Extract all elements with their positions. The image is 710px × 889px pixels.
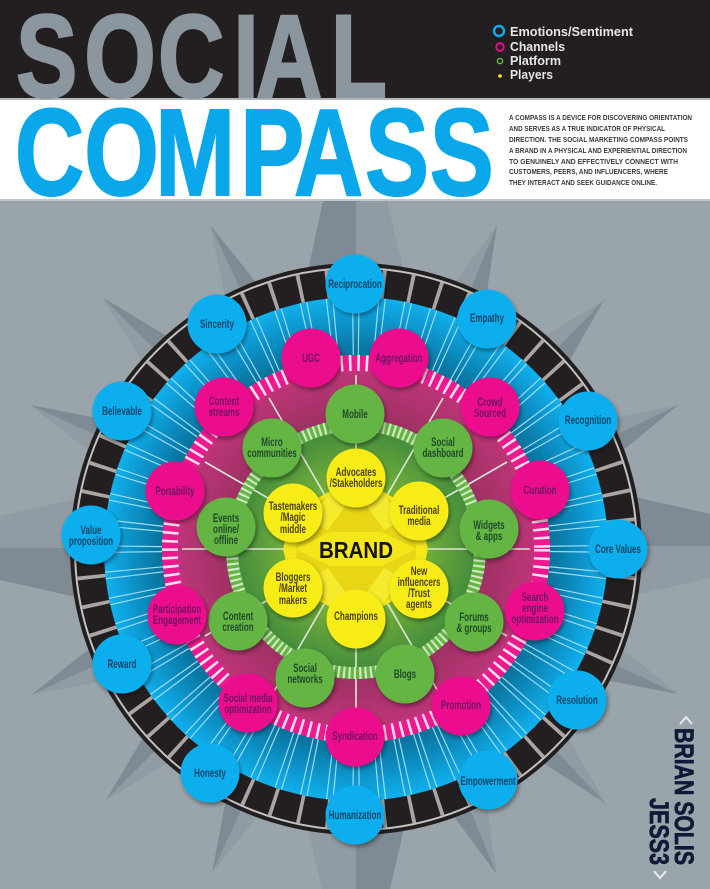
node: Forums & groups: & groups: [456, 623, 492, 635]
node: Tastemakers/Magic middle: [264, 484, 322, 542]
node: Crowd Sourced: [460, 378, 520, 436]
node: Empathy: [458, 290, 516, 348]
node: Champions: [326, 590, 386, 648]
channels nodes (magenta): [146, 328, 570, 766]
node: Traditional media: media: [407, 516, 431, 528]
node: Value proposition: [62, 506, 120, 564]
node: Syndication: [326, 708, 384, 766]
node: Reciprocation: Reciprocation: [328, 279, 382, 291]
legend: Channels: Channels: [510, 39, 565, 54]
node: Syndication: Syndication: [332, 731, 378, 743]
node: Curation: [510, 460, 570, 520]
node: Blogs: Blogs: [394, 669, 417, 681]
node: Content streams: [194, 378, 254, 436]
spokes between rings: [182, 375, 530, 723]
node: Participation Engagement: Participation: [153, 604, 201, 616]
node: Social networks: Social: [293, 663, 317, 675]
center label: BRAND: BRAND: [319, 537, 393, 563]
node: Empathy: Empathy: [470, 313, 504, 325]
node: Bloggers/Market makers: [264, 558, 322, 618]
node: Humanization: [326, 786, 384, 844]
node: New influencers/Trust agents: [390, 560, 448, 618]
node: Search engine optimization: engine: [522, 603, 548, 615]
node: Champions: Champions: [334, 611, 378, 623]
node: Content creation: creation: [222, 622, 254, 634]
node: Empowerment: Empowerment: [460, 776, 516, 788]
node: Tastemakers/Magic middle: Tastemakers: [269, 501, 318, 513]
node: Tastemakers/Magic middle: middle: [280, 524, 306, 536]
node: UGC: [282, 328, 340, 388]
node: Forums & groups: Forums: [459, 612, 489, 624]
intro paragraph: [509, 113, 692, 187]
node: Content streams: streams: [209, 407, 240, 419]
ring: blue emotions band: [104, 297, 608, 801]
intro paragraph: THEY INTERACT AND SEEK GUIDANCE ONLINE.: [509, 178, 657, 187]
legend: Players: Players: [510, 67, 553, 82]
node: Honesty: [180, 744, 240, 802]
node: UGC: UGC: [302, 353, 320, 365]
node: Advocates/Stakeholders: Advocates: [336, 467, 377, 479]
node: Bloggers/Market makers: /Market: [279, 583, 308, 595]
node: Widgets & apps: [460, 500, 518, 558]
node: New influencers/Trust agents: /Trust: [408, 588, 430, 600]
node: Sincerity: [188, 294, 246, 354]
brand core hexagon: [283, 476, 428, 622]
node: Social dashboard: dashboard: [422, 448, 464, 460]
intro paragraph: AND SERVES AS A TRUE INDICATOR OF PHYSICAL: [509, 124, 665, 133]
node: Widgets & apps: Widgets: [473, 520, 505, 532]
node: Social dashboard: [414, 418, 472, 478]
node: Value proposition: proposition: [69, 536, 113, 548]
node: New influencers/Trust agents: agents: [406, 599, 432, 611]
credit: chevron close: [654, 871, 666, 878]
node: Core Values: Core Values: [595, 544, 641, 556]
ring: magenta channels band: [162, 355, 550, 743]
node: Aggregation: Aggregation: [375, 353, 423, 365]
legend: Platform: Platform: [510, 53, 561, 68]
node: Events online/offline: [196, 498, 256, 556]
node: Humanization: Humanization: [329, 810, 381, 822]
node: Traditional media: [390, 482, 448, 540]
node: Forums & groups: [444, 592, 504, 652]
node: Social media optimization: optimization: [224, 704, 272, 716]
node: Recognition: Recognition: [565, 415, 611, 427]
platform nodes (green): [196, 384, 518, 708]
ring: black outer band: [70, 263, 642, 835]
intro paragraph: CUSTOMERS, PEERS, AND INFLUENCERS, WHERE: [509, 167, 668, 176]
credits: [644, 717, 699, 878]
node: Search engine optimization: [506, 582, 564, 640]
emotions nodes (blue): [62, 254, 648, 844]
node: Resolution: Resolution: [556, 695, 598, 707]
node: Crowd Sourced: Crowd: [477, 397, 503, 409]
node: Events online/offline: offline: [214, 535, 238, 547]
node: Content creation: [208, 592, 268, 650]
node: Resolution: [548, 670, 606, 730]
node: Promotion: [432, 676, 490, 736]
legend: Emotions/Sentiment: Emotions/Sentiment: [510, 24, 634, 39]
players nodes (yellow): [264, 448, 448, 648]
node: Widgets & apps: & apps: [476, 531, 503, 543]
node: Believable: Believable: [102, 406, 142, 418]
node: Reward: Reward: [107, 659, 137, 671]
compass dial: [70, 263, 642, 835]
node: Search engine optimization: optimization: [511, 614, 559, 626]
node: Traditional media: Traditional: [399, 505, 440, 517]
node: Blogs: [376, 644, 434, 704]
compass star points: [0, 201, 710, 889]
node: Aggregation: [370, 328, 428, 388]
node: Advocates/Stakeholders: /Stakeholders: [330, 478, 383, 490]
header band: [0, 0, 710, 201]
node: Bloggers/Market makers: Bloggers: [276, 572, 311, 584]
node: Curation: Curation: [523, 485, 557, 497]
credit: Jess3: JESS3: [644, 798, 674, 865]
node: Social dashboard: Social: [431, 437, 455, 449]
node: Bloggers/Market makers: makers: [279, 595, 307, 607]
node: New influencers/Trust agents: New: [411, 566, 427, 578]
node: Social media optimization: [218, 674, 278, 732]
node: Believable: [92, 382, 152, 440]
node: Portability: [146, 462, 204, 520]
node: Micro communities: communities: [247, 448, 297, 460]
node: Tastemakers/Magic middle: /Magic: [280, 512, 306, 524]
node: Content creation: Content: [223, 611, 254, 623]
node: New influencers/Trust agents: influencers: [398, 577, 441, 589]
node: Core Values: [588, 520, 648, 578]
node: Promotion: Promotion: [441, 700, 481, 712]
title: COMPASS: COMPASS: [15, 85, 494, 222]
node: Social networks: networks: [287, 674, 323, 686]
node: Micro communities: [242, 418, 302, 478]
node: Sincerity: Sincerity: [200, 319, 234, 331]
node: Micro communities: Micro: [261, 437, 283, 449]
node: Events online/offline: online/: [213, 524, 239, 536]
node: Social media optimization: Social media: [223, 693, 273, 705]
node: Social networks: [276, 648, 334, 708]
node: Search engine optimization: Search: [522, 592, 548, 604]
node: Recognition: [558, 392, 618, 450]
node: Participation Engagement: [148, 586, 206, 644]
node: Events online/offline: Events: [213, 513, 240, 525]
node: Portability: Portability: [155, 486, 195, 498]
node: Honesty: Honesty: [194, 768, 226, 780]
node: Participation Engagement: Engagement: [153, 615, 202, 627]
node: Mobile: [326, 384, 384, 444]
ring: green platform band: [226, 419, 486, 679]
node: Value proposition: Value: [81, 525, 102, 537]
legend: [494, 24, 634, 82]
node: Content streams: Content: [209, 396, 240, 408]
node: Advocates/Stakeholders: [326, 448, 386, 508]
node: Reward: [92, 634, 152, 694]
node: Reciprocation: [326, 254, 384, 314]
intro paragraph: TO GENUINELY AND EFFECTIVELY CONNECT WITH: [509, 157, 678, 166]
credit: chevron open: [680, 717, 692, 724]
node: Empowerment: [458, 750, 518, 810]
node: Crowd Sourced: Sourced: [474, 408, 506, 420]
node: Mobile: Mobile: [342, 409, 368, 421]
